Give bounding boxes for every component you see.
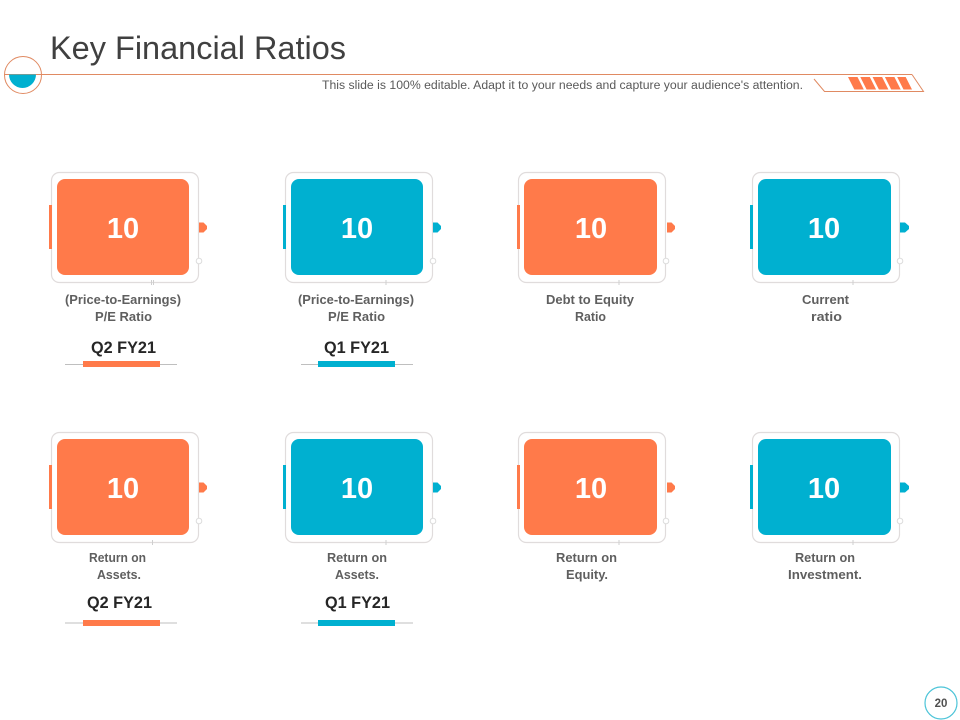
period: Q1 FY21 row 2 — [301, 594, 413, 626]
card: row 2 column 3 — [517, 432, 675, 545]
label: row 2 column 2 — [327, 551, 387, 582]
card: row 1 column 2: 10 — [341, 213, 373, 245]
card: row 1 column 1: 10 — [107, 213, 139, 245]
label: row 1 column 4 — [802, 293, 850, 324]
page number: 20 — [935, 698, 947, 710]
card: row 2 column 2: 10 — [341, 473, 373, 505]
period: Q1 FY21 row 2: Q1 FY21 — [325, 594, 390, 612]
label: row 2 column 1: Return on — [89, 551, 146, 565]
icon: striped tag — [814, 74, 924, 92]
card: row 2 column 4 — [750, 432, 909, 545]
card: row 1 column 3 — [517, 172, 675, 285]
period: Q2 FY21 row 2 — [65, 594, 177, 626]
label: row 2 column 2: Assets. — [335, 568, 379, 582]
period: Q1 FY21 row 1 — [301, 339, 413, 367]
label: row 2 column 4: Return on — [795, 551, 855, 565]
label: row 1 column 3: Debt to Equity — [546, 293, 634, 307]
period: Q1 FY21 row 1: Q1 FY21 — [324, 339, 389, 357]
label: row 1 column 3: Ratio — [575, 310, 606, 324]
label: row 2 column 1: Assets. — [97, 568, 141, 582]
card: row 2 column 1 — [49, 432, 207, 545]
label: row 1 column 2: (Price-to-Earnings) — [298, 293, 414, 307]
card: row 1 column 2 — [283, 172, 441, 285]
period: Q2 FY21 row 2: Q2 FY21 — [87, 594, 152, 612]
subtitle: This slide is 100% editable. Adapt it to your needs and capture your audience's attention. — [322, 80, 803, 92]
card: row 2 column 1: 10 — [107, 473, 139, 505]
period: Q2 FY21 row 1: Q2 FY21 — [91, 339, 156, 357]
label: row 1 column 4: ratio — [811, 310, 842, 324]
label: row 1 column 1: P/E Ratio — [95, 310, 152, 324]
header rule — [4, 74, 912, 76]
label: row 1 column 1: (Price-to-Earnings) — [65, 293, 181, 307]
card: row 2 column 4: 10 — [808, 473, 840, 505]
card: row 1 column 3: 10 — [575, 213, 607, 245]
card: row 1 column 4 — [750, 172, 909, 285]
label: row 2 column 3 — [556, 551, 617, 582]
period: Q2 FY21 row 1 — [65, 339, 177, 367]
label: row 1 column 2 — [298, 293, 414, 324]
label: row 1 column 2: P/E Ratio — [328, 310, 385, 324]
card: row 2 column 2 — [283, 432, 441, 545]
card: row 1 column 1 — [49, 172, 207, 285]
label: row 1 column 1 — [65, 293, 181, 324]
label: row 2 column 1 — [89, 551, 146, 582]
label: row 2 column 3: Return on — [556, 551, 617, 565]
icon: header circle — [4, 56, 42, 94]
title: Key Financial Ratios — [50, 30, 346, 66]
label: row 2 column 4 — [788, 551, 862, 582]
label: row 2 column 2: Return on — [327, 551, 387, 565]
card: row 1 column 4: 10 — [808, 213, 840, 245]
label: row 2 column 3: Equity. — [566, 568, 608, 582]
label: row 1 column 4: Current — [802, 293, 850, 307]
label: row 1 column 3 — [546, 293, 634, 324]
page number — [925, 687, 957, 719]
card: row 2 column 3: 10 — [575, 473, 607, 505]
label: row 2 column 4: Investment. — [788, 568, 862, 582]
